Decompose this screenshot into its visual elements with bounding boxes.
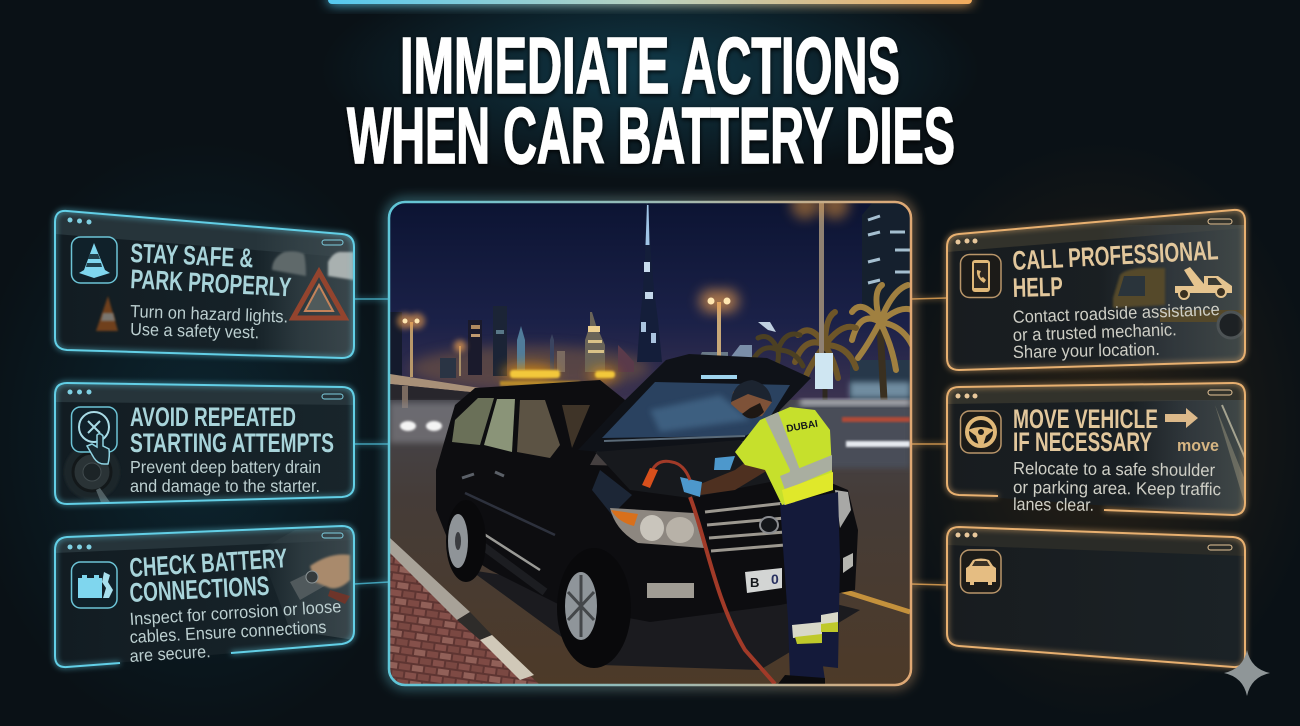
icon: car front <box>960 550 1001 593</box>
scene: road edge <box>947 383 1245 515</box>
body text <box>130 457 321 496</box>
heading: STAY SAFE & <box>130 238 254 273</box>
Burj tower <box>637 203 662 362</box>
car shadow <box>470 570 860 670</box>
worker head <box>731 380 772 419</box>
title <box>347 21 955 180</box>
panel: move vehicle if necessary <box>947 383 1245 515</box>
heading: AVOID REPEATED <box>130 402 296 432</box>
body text: Turn on hazard lights. <box>130 301 288 327</box>
body text: or a trusted mechanic. <box>1012 319 1177 345</box>
scene: road, cars, warning triangle and cone <box>55 211 355 360</box>
icon: stop cross and pointing hand <box>72 407 117 464</box>
body text <box>1013 458 1221 515</box>
body text: lanes clear. <box>1013 494 1094 515</box>
body text: and damage to the starter. <box>130 476 320 496</box>
scene: engine bay and hand <box>55 526 354 640</box>
arm and gloves <box>680 455 768 497</box>
window dots and pill <box>956 532 1232 550</box>
window dots and pill <box>68 218 343 245</box>
central photo: roadside battery jump start in Dubai at night <box>389 191 912 685</box>
number plate: 0 <box>771 571 779 587</box>
engine bay <box>595 440 780 498</box>
top glowing bar <box>328 0 972 4</box>
icon: steering wheel <box>960 411 1001 453</box>
night sky <box>390 203 910 403</box>
right tower <box>850 203 910 402</box>
jumper cables <box>642 461 775 684</box>
heading <box>130 402 334 458</box>
turn signal <box>611 510 638 526</box>
panel: empty sixth card <box>947 527 1245 667</box>
heading: CALL PROFESSIONAL <box>1012 235 1219 276</box>
panel: check battery connections <box>55 526 354 667</box>
scene: tow truck on road <box>947 209 1245 365</box>
body text: Use a safety vest. <box>130 319 259 342</box>
scene: ignition button <box>55 383 354 505</box>
body text: or parking area. Keep traffic <box>1013 477 1221 499</box>
window dots and pill <box>68 390 343 399</box>
icon: phone <box>960 254 1001 298</box>
body text: Prevent deep battery drain <box>130 457 321 477</box>
label: move: move <box>1177 436 1219 455</box>
panel: call professional help <box>947 209 1245 370</box>
heading: CHECK BATTERY <box>128 543 288 583</box>
heading: PARK PROPERLY <box>130 264 292 302</box>
body text <box>129 596 342 666</box>
icon: tow truck <box>1175 267 1232 299</box>
background traffic lights and streaks <box>390 400 910 612</box>
wheels <box>446 500 631 668</box>
body text: are secure. <box>129 641 211 666</box>
open hood <box>578 354 811 452</box>
heading <box>130 238 292 302</box>
billboard <box>815 353 833 389</box>
body text <box>130 301 288 342</box>
icon: traffic cone <box>72 237 117 283</box>
overpass <box>390 374 480 408</box>
amber roof lights <box>500 364 617 386</box>
pavement and curb <box>390 538 540 685</box>
panel: stay safe and park properly <box>55 211 355 360</box>
body text: Contact roadside assistance <box>1012 299 1220 327</box>
heading: HELP <box>1012 272 1063 303</box>
title: IMMEDIATE ACTIONS <box>400 21 900 110</box>
number plate <box>745 568 782 593</box>
heading: CONNECTIONS <box>129 571 270 608</box>
body text: Relocate to a safe shoulder <box>1013 458 1215 480</box>
panel: avoid repeated starting attempts <box>55 383 354 505</box>
heading <box>1013 404 1158 457</box>
headlight <box>610 508 704 548</box>
heading: MOVE VEHICLE <box>1013 404 1158 434</box>
body text <box>1012 299 1220 362</box>
arrow: move direction <box>1165 408 1198 428</box>
SUV body <box>436 380 858 622</box>
number plate: B <box>750 575 759 590</box>
window dots and pill <box>956 390 1232 398</box>
safety vest: DUBAI <box>786 419 819 435</box>
road <box>390 400 910 685</box>
palm trees <box>752 285 912 400</box>
heading: STARTING ATTEMPTS <box>130 428 334 458</box>
icon: battery and wrench <box>72 562 117 608</box>
sparkle watermark <box>1224 650 1270 696</box>
heading: IF NECESSARY <box>1013 427 1152 457</box>
safety vest <box>735 407 833 505</box>
body text: cables. Ensure connections <box>129 617 327 647</box>
street lamps <box>397 191 849 377</box>
window dots and pill <box>68 533 343 550</box>
heading <box>1012 235 1219 303</box>
connector lines <box>354 298 947 585</box>
fog lamp and right headlight <box>647 490 853 598</box>
city skyline <box>390 306 776 378</box>
body text: Share your location. <box>1013 339 1160 362</box>
window dots and pill <box>956 219 1232 244</box>
heading <box>128 543 288 608</box>
grille and logo <box>705 503 785 551</box>
body text: Inspect for corrosion or loose <box>129 596 342 629</box>
worker trousers <box>778 492 840 684</box>
